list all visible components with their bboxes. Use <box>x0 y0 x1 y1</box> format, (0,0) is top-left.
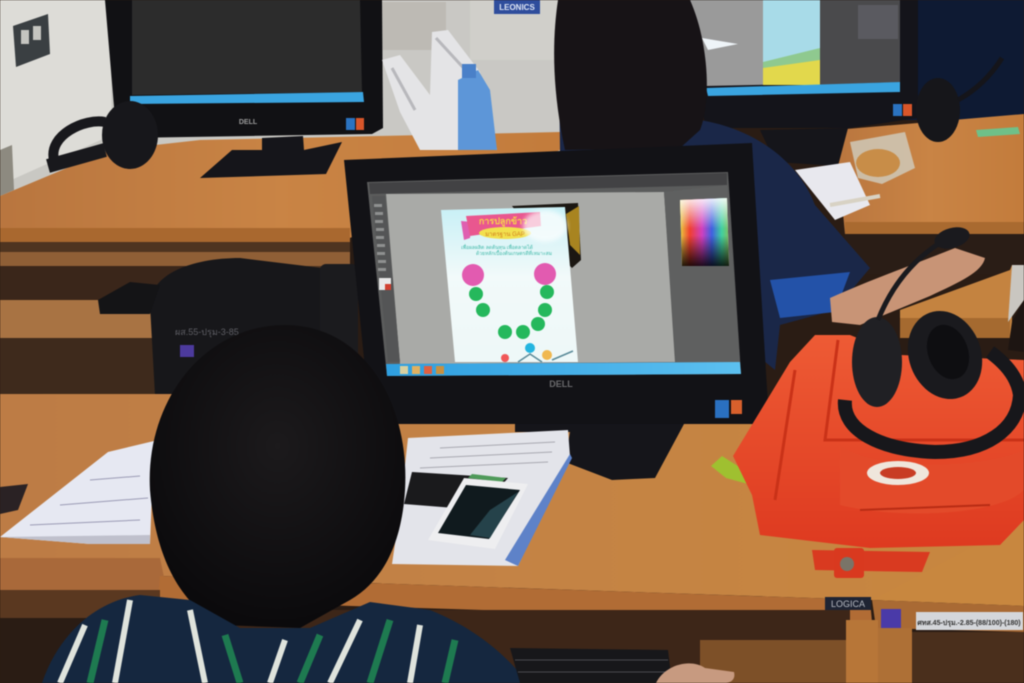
poster subtitle: ด้วยหลักเบื้องต้นเกษตรดีที่เหมาะสม <box>476 248 552 257</box>
papers and pen <box>795 162 880 220</box>
person in navy shirt <box>554 0 985 370</box>
glare <box>523 210 567 242</box>
back desk right <box>835 114 1024 352</box>
candy wrapper <box>711 456 748 484</box>
black chair <box>150 258 360 395</box>
white papers left <box>0 441 154 544</box>
logica label: LOGICA <box>831 599 865 609</box>
LEONICS sign <box>494 0 540 14</box>
back desk left <box>0 132 560 394</box>
backpack strap <box>812 550 930 572</box>
black chair: ผส.55-ปรุม-3-85 <box>175 327 239 338</box>
poster circles <box>462 264 484 286</box>
person in front: patterned shirt <box>42 595 528 683</box>
dark phone <box>404 472 508 510</box>
back speaker <box>916 58 1002 142</box>
red backpack <box>733 335 1024 578</box>
brand: DELL <box>549 379 573 389</box>
back left monitor <box>105 0 383 178</box>
hand on mouse <box>656 663 734 683</box>
back left monitor: DELL <box>239 119 258 126</box>
back right monitor <box>690 0 918 166</box>
poster subtitle: เพื่อผลผลิต ลดต้นทุน เพื่อตลาดได้ <box>461 244 533 251</box>
main monitor <box>344 143 768 480</box>
headset on back desk <box>48 101 158 169</box>
asset tag: ศทส.45-ปรุม.-2.85-(88/100)-(180) <box>917 619 1021 627</box>
keyboard back <box>98 282 160 314</box>
food box on desk <box>850 132 915 184</box>
person in front: hair <box>150 325 405 628</box>
front keyboard <box>510 648 672 683</box>
illustrator canvas <box>386 192 675 364</box>
screen <box>367 172 741 376</box>
LEONICS sign: LEONICS <box>499 3 535 12</box>
poster title ribbon <box>461 212 541 240</box>
tools and top bar <box>369 173 727 194</box>
plastic bag and bottle <box>382 30 497 150</box>
sticky note <box>976 127 1020 137</box>
backpack logo <box>867 461 929 485</box>
right panel <box>664 185 740 362</box>
open notebook with papers <box>392 430 572 566</box>
monitor stand <box>515 424 684 480</box>
thermos flask <box>320 264 358 364</box>
poster title ribbon: การปลูกข้าว <box>479 216 527 227</box>
monitor bezel <box>344 143 768 424</box>
wall light switch <box>13 14 50 67</box>
logica label <box>825 597 871 610</box>
smartphone <box>428 478 528 549</box>
poster artboard <box>441 207 578 362</box>
main headset <box>845 224 1020 452</box>
taskbar <box>386 362 741 376</box>
asset tag <box>881 609 1023 630</box>
poster subtitle <box>461 244 552 257</box>
dark artboard <box>512 203 581 268</box>
poster pins <box>525 343 535 353</box>
poster title ribbon: มาตรฐาน GAP <box>485 231 525 238</box>
front desk <box>0 394 1024 683</box>
